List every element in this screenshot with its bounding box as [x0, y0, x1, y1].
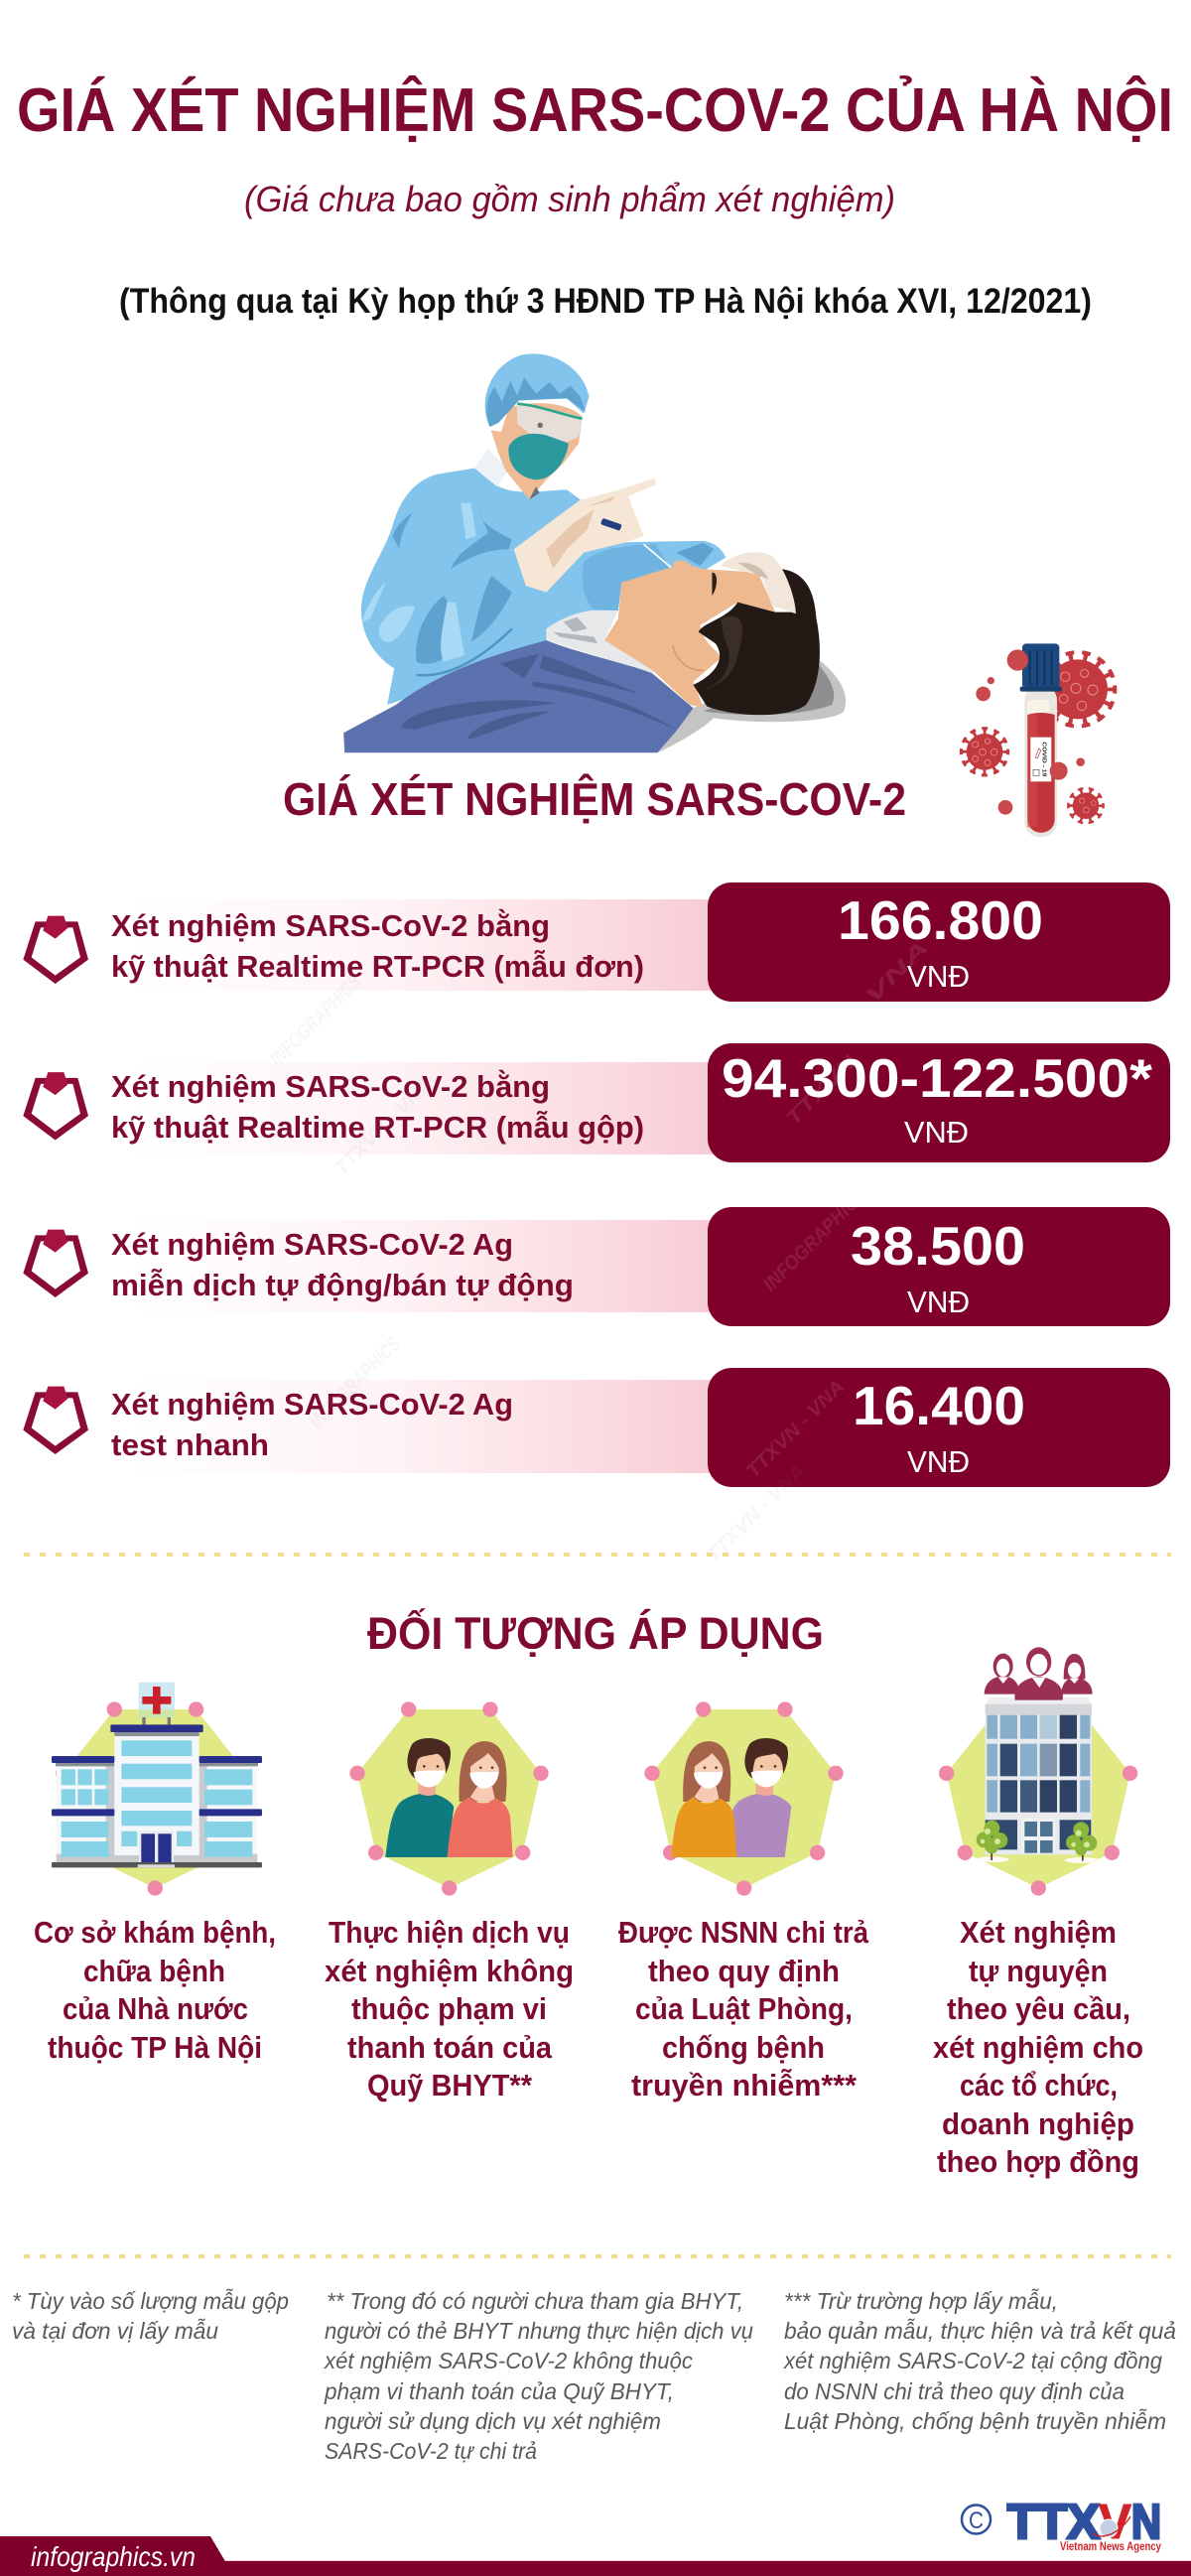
logo: TTXVN: C	[969, 2508, 984, 2534]
caption: voluntary and contract testing: doanh nghiệp	[942, 2106, 1134, 2141]
footnote 2: ** Trong đó có người chưa tham gia BHYT,	[327, 2288, 743, 2314]
caption: voluntary and contract testing: các tổ chức,	[960, 2068, 1118, 2102]
panel: state budget column	[618, 1701, 869, 2102]
subtitle: (Giá chưa bao gồm sinh phẩm xét nghiệm)	[244, 179, 895, 219]
footnote 2	[324, 2288, 753, 2464]
logo: TTXVN: N	[1131, 2496, 1161, 2549]
icon: pentagon bullet 2	[23, 1072, 88, 1140]
logo: TTXVN	[962, 2496, 1162, 2553]
footnote 2: phạm vi thanh toán của Quỹ BHYT,	[324, 2378, 674, 2404]
icon: blood test tube and viruses	[961, 643, 1115, 837]
price value 3: 38.500	[851, 1215, 1025, 1277]
price value 1: 166.800	[838, 889, 1043, 951]
panel: price row 4	[23, 1368, 1170, 1487]
caption: state budget paid: chống bệnh	[662, 2030, 825, 2065]
price value 2	[722, 1047, 1153, 1150]
icon: pentagon bullet 3	[23, 1230, 88, 1297]
label: Ag rapid test: test nhanh	[111, 1427, 269, 1462]
price value 3: VNĐ	[907, 1285, 970, 1319]
caption: state budget paid: truyền nhiễm***	[631, 2068, 858, 2102]
logo: TTXVN: Vietnam News Agency	[1060, 2541, 1162, 2553]
illustration: doctor swabbing patient	[343, 353, 846, 752]
caption: services outside insurance	[325, 1915, 574, 2102]
footnote 3	[783, 2287, 1176, 2434]
label: RT-PCR pooled sample: Xét nghiệm SARS-CoV-2 bằng	[111, 1068, 550, 1104]
price value 2: 94.300-122.500*	[722, 1047, 1153, 1109]
caption: services outside insurance: thuộc phạm vi	[351, 1991, 547, 2026]
icon: couple with masks 1	[349, 1701, 549, 1896]
label: Ag rapid test	[111, 1387, 513, 1462]
caption: services outside insurance: Quỹ BHYT**	[367, 2068, 533, 2102]
panel: price row 1	[23, 882, 1170, 1002]
caption: public health facilities: thuộc TP Hà Nội	[48, 2030, 262, 2065]
icon: hospital	[52, 1683, 262, 1896]
label: RT-PCR pooled sample: kỹ thuật Realtime RT-PCR (mẫu gộp)	[111, 1110, 644, 1145]
icon: blood test tube and viruses: COVID - 19	[1041, 742, 1047, 776]
footnote 1	[12, 2287, 289, 2344]
caption: voluntary and contract testing	[933, 1915, 1143, 2179]
caption: public health facilities: Cơ sở khám bệnh,	[34, 1915, 276, 1950]
watermarks	[266, 936, 933, 1567]
footnote 2: xét nghiệm SARS-CoV-2 không thuộc	[324, 2348, 693, 2373]
footnote 2: người có thẻ BHYT nhưng thực hiện dịch vụ	[325, 2318, 753, 2344]
panel: outside insurance column	[325, 1701, 574, 2102]
watermarks: VNA	[861, 936, 933, 1009]
icon: pentagon bullet 1	[23, 916, 88, 984]
watermarks: TTXVN	[782, 1051, 861, 1131]
watermarks: INFOGRAPHICS	[266, 971, 366, 1071]
price value 4: VNĐ	[907, 1444, 970, 1479]
panel: voluntary testing column	[933, 1647, 1143, 2179]
caption: public health facilities	[34, 1915, 276, 2065]
label: Ag automated immunoassay	[111, 1227, 574, 1302]
logo: TTXVN: V	[1099, 2496, 1131, 2549]
price value 4: 16.400	[853, 1375, 1025, 1436]
caption: voluntary and contract testing: Xét nghiệm	[960, 1915, 1117, 1950]
caption: voluntary and contract testing: theo yêu cầu,	[947, 1991, 1130, 2026]
caption: state budget paid: của Luật Phòng,	[635, 1991, 853, 2026]
caption: voluntary and contract testing: tự nguyện	[969, 1954, 1108, 1988]
footnote 3: Luật Phòng, chống bệnh truyền nhiễm	[784, 2407, 1166, 2434]
caption: public health facilities: của Nhà nước	[63, 1991, 248, 2026]
watermarks: TTXVN - VNA	[331, 1073, 437, 1180]
footnote 1: * Tùy vào số lượng mẫu gộp	[12, 2287, 289, 2314]
caption: voluntary and contract testing: xét nghiệm cho	[933, 2030, 1143, 2065]
watermarks: INFOGRAPHICS	[306, 1333, 406, 1433]
footnote 2: SARS-CoV-2 tự chi trả	[325, 2438, 537, 2464]
footnote 3: *** Trừ trường hợp lấy mẫu,	[784, 2287, 1058, 2314]
panel: hospital column	[34, 1683, 276, 2065]
footer bar with site name: infographics.vn	[31, 2541, 196, 2572]
footnote 3: bảo quản mẫu, thực hiện và trả kết quả	[784, 2317, 1176, 2344]
caption: services outside insurance: xét nghiệm không	[325, 1954, 574, 1988]
caption: voluntary and contract testing: theo hợp đồng	[937, 2144, 1139, 2179]
label: RT-PCR pooled sample	[111, 1068, 644, 1145]
price value 3	[851, 1215, 1025, 1319]
icon: couple with masks 2	[644, 1701, 844, 1896]
price value 4	[853, 1375, 1025, 1479]
footnote 1: và tại đơn vị lấy mẫu	[12, 2317, 218, 2344]
caption: public health facilities: chữa bệnh	[83, 1954, 225, 1988]
footnote 2: người sử dụng dịch vụ xét nghiệm	[325, 2408, 661, 2434]
label: RT-PCR single sample: kỹ thuật Realtime RT-PCR (mẫu đơn)	[111, 949, 644, 984]
label: RT-PCR single sample	[111, 907, 644, 984]
label: Ag rapid test: Xét nghiệm SARS-CoV-2 Ag	[111, 1387, 513, 1422]
approval note: (Thông qua tại Kỳ họp thứ 3 HĐND TP Hà Nội khóa XVI, 12/2021)	[119, 282, 1092, 321]
icon: office building with people	[939, 1647, 1137, 1896]
panel: price row 2	[23, 1043, 1170, 1162]
price value 1: VNĐ	[907, 959, 970, 994]
logo: TTXVN: TTX	[1007, 2496, 1100, 2549]
icon: pentagon bullet 4	[23, 1387, 88, 1454]
caption: state budget paid: Được NSNN chi trả	[618, 1915, 869, 1950]
heading: test prices: GIÁ XÉT NGHIỆM SARS-COV-2	[283, 773, 906, 825]
watermarks: TTXVN - VNA	[703, 1460, 809, 1567]
footnote 3: xét nghiệm SARS-CoV-2 tại cộng đồng	[783, 2348, 1162, 2373]
footnote 3: do NSNN chi trả theo quy định của	[784, 2378, 1125, 2404]
caption: state budget paid	[618, 1915, 869, 2102]
price value 1	[838, 889, 1043, 994]
label: Ag automated immunoassay: Xét nghiệm SARS-CoV-2 Ag	[111, 1227, 513, 1262]
watermarks: TTXVN - VNA	[742, 1376, 849, 1483]
heading: applicable subjects: ĐỐI TƯỢNG ÁP DỤNG	[367, 1608, 824, 1659]
panel: price row 3	[23, 1207, 1170, 1326]
watermarks: INFOGRAPHICS	[759, 1183, 872, 1296]
caption: services outside insurance: Thực hiện dịch vụ	[329, 1915, 570, 1950]
footer bar with site name	[0, 2536, 1191, 2576]
caption: services outside insurance: thanh toán của	[347, 2030, 553, 2065]
caption: state budget paid: theo quy định	[648, 1954, 840, 1988]
label: RT-PCR single sample: Xét nghiệm SARS-CoV-2 bằng	[111, 907, 550, 943]
label: Ag automated immunoassay: miễn dịch tự động/bán tự động	[111, 1268, 574, 1302]
price value 2: VNĐ	[904, 1115, 969, 1150]
